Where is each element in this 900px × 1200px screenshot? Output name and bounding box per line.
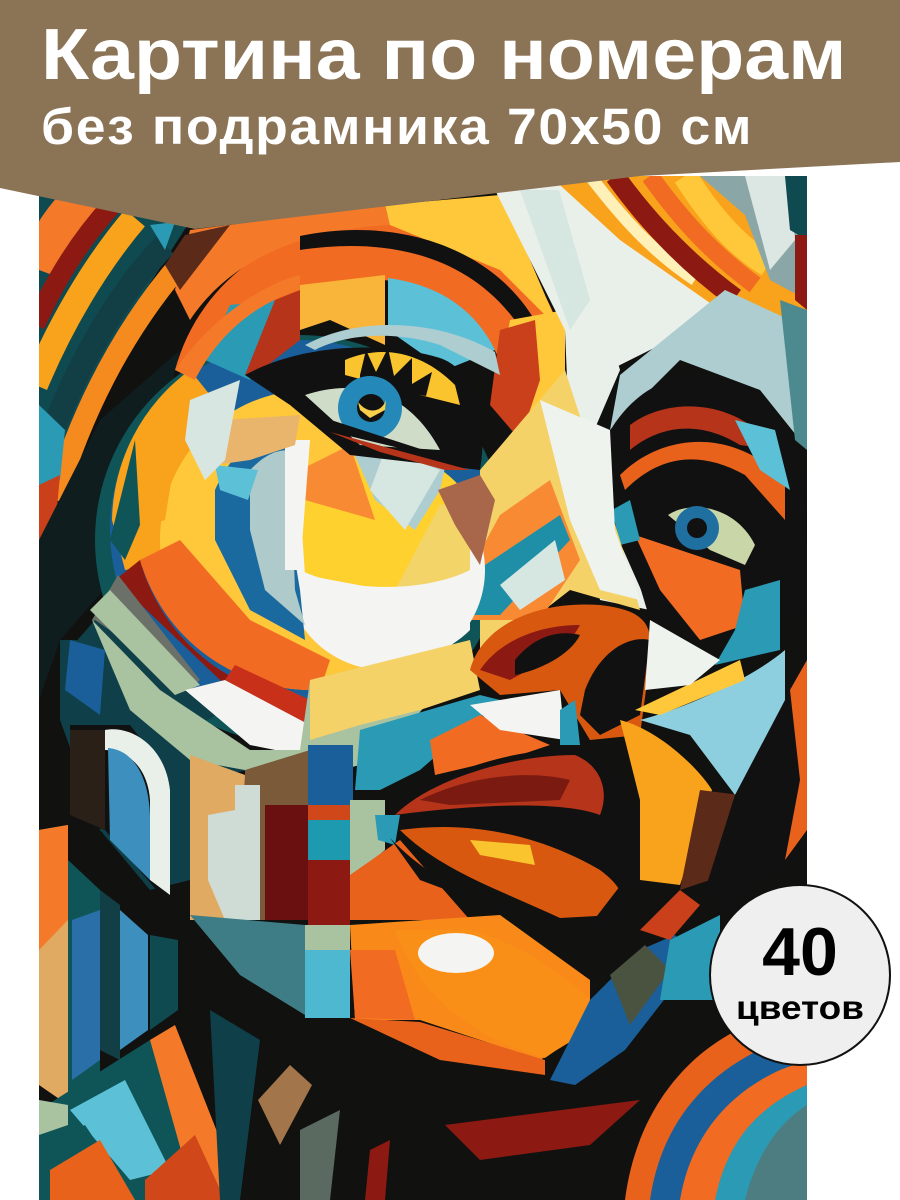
badge: 40 colours xyxy=(709,884,891,1066)
left eye xyxy=(245,325,500,470)
subtitle: без подрамника 70х50 см xyxy=(41,98,753,155)
lower chin orange xyxy=(190,915,590,1075)
lower left panels xyxy=(39,825,240,1200)
central yellow face plane xyxy=(470,370,640,660)
chin-jaw patchwork blocks xyxy=(190,690,565,925)
hair top left stripes xyxy=(39,196,186,540)
nose xyxy=(470,604,651,745)
right cheek xyxy=(620,620,807,915)
upper forehead orange arcs xyxy=(165,195,565,450)
inner cheek rings xyxy=(110,380,310,640)
white and sage lower left cheek xyxy=(60,590,480,900)
dark left head xyxy=(39,350,180,700)
right temple blue wedge xyxy=(610,290,800,440)
badge label: цветов xyxy=(736,989,864,1026)
neck shapes xyxy=(210,1010,640,1200)
title: Картина по номерам xyxy=(41,15,846,95)
painting: abstract geometric portrait of a woman's face xyxy=(39,176,807,1200)
badge number: 40 xyxy=(762,914,838,990)
cheek pie wheel and white xyxy=(285,445,495,670)
banner: brown header ribbon xyxy=(0,0,900,229)
hair top right arcs xyxy=(560,176,807,316)
lower right rings xyxy=(625,1034,807,1200)
jaw right blocks xyxy=(550,890,720,1085)
forehead white plane xyxy=(496,186,710,610)
right eye socket xyxy=(610,388,790,665)
left cheek concentric rings xyxy=(92,335,505,745)
lips xyxy=(375,752,618,918)
